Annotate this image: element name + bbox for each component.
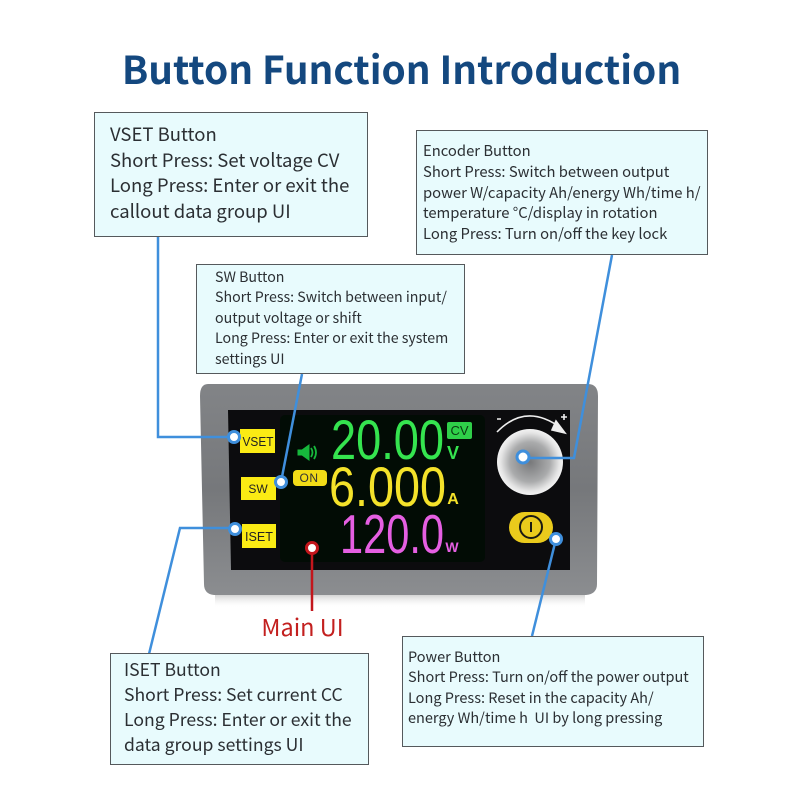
unit V: V [447,443,459,463]
main UI label: Main UI [261,609,344,643]
panel: SW button: Long Press: Enter or exit the system [215,328,448,348]
panel: SW button [196,264,465,374]
callout line: encoder [517,255,612,463]
panel: SW button: Short Press: Switch between input/ [215,287,447,307]
button: SW: SW [248,482,268,496]
callout line: power [532,534,562,636]
panel: encoder button: Long Press: Turn on/off the key lock [423,223,667,244]
panel: ISET button: Short Press: Set current CC [124,682,343,707]
power button [509,512,553,543]
voltage reading: 20.00 [331,408,444,471]
panel: power button: energy Wh/time h UI by long pressing [408,707,662,728]
panel: encoder button: temperature °C/display in rotation [423,202,657,223]
panel: ISET button: data group settings UI [124,732,304,757]
icon: speaker [298,445,316,460]
button: ISET: ISET [245,529,273,544]
panel: power button [402,636,704,747]
power reading: 120.0 [340,503,444,565]
button: VSET: VSET [242,434,274,449]
callout line: SW [276,374,302,488]
panel: ISET button: ISET Button [124,657,221,682]
panel: VSET button: Long Press: Enter or exit the [110,172,349,198]
CV badge: CV [450,423,469,438]
panel: power button: Power Button [408,646,500,667]
callout line: main UI [306,542,318,611]
title: Button Function Introduction [122,40,681,96]
panel: encoder button [416,130,708,255]
panel: power button: Short Press: Turn on/off the power output [408,666,689,687]
unit A: A [447,491,459,508]
panel: SW button: SW Button [215,267,284,287]
current reading: 6.000 [329,455,446,518]
unit W: W [445,539,459,555]
panel: encoder button: Encoder Button [423,140,531,161]
shell shadow [215,592,585,608]
button: VSET [240,429,275,453]
panel: SW button: output voltage or shift [215,308,362,328]
encoder knob [497,429,563,495]
button: ISET [242,524,276,548]
panel: SW button: settings UI [215,349,284,369]
panel: VSET button: Short Press: Set voltage CV [110,147,339,173]
callout line: ISET [149,524,240,654]
device shell [200,384,598,595]
callout line: VSET [158,237,240,442]
panel: VSET button: VSET Button [110,121,217,147]
panel: power button: Long Press: Reset in the capacity Ah/ [408,687,654,708]
front panel [228,410,570,570]
button: SW [241,477,276,500]
panel: encoder button: Short Press: Switch between output [423,161,669,182]
panel: encoder button: power W/capacity Ah/energy Wh/time h/ [423,182,701,203]
ON badge [293,470,327,486]
panel: ISET button [110,653,369,765]
panel: VSET button: callout data group UI [110,198,291,224]
ON badge: ON [300,471,318,485]
panel: ISET button: Long Press: Enter or exit the [124,707,352,732]
panel: VSET button [94,112,368,237]
CV badge [447,422,472,439]
rotation arrow [497,414,567,433]
lcd screen [280,415,485,562]
